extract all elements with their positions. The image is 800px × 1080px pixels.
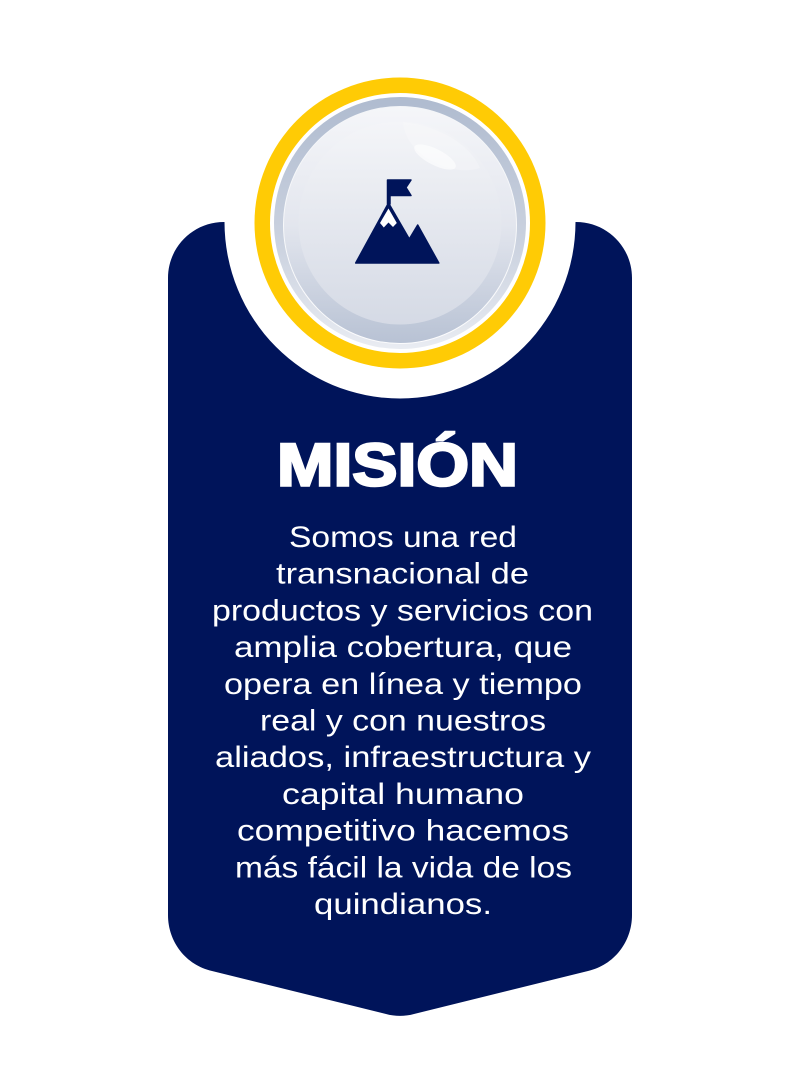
text block: mission statement: productos y servicios con (212, 594, 593, 627)
heading: MISIÓN: MISIÓN (277, 432, 518, 498)
text block: mission statement: amplia cobertura, que (234, 631, 572, 664)
text block: mission statement: Somos una red (289, 521, 517, 554)
icon badge: gold ring and glossy button (254, 78, 546, 368)
text block: mission statement: transnacional de (276, 558, 529, 591)
text block: mission statement: quindianos. (314, 888, 492, 921)
icon: mountain with flag (356, 180, 439, 263)
text block: mission statement: real y con nuestros (260, 704, 546, 738)
text block: mission statement: más fácil la vida de los (235, 851, 572, 884)
text block: mission statement: aliados, infraestructura y (215, 741, 591, 774)
text block: mission statement: competitivo hacemos (237, 815, 569, 848)
text block: mission statement: opera en línea y tiempo (224, 668, 582, 701)
panel: navy shield (168, 222, 632, 1016)
text block: mission statement (212, 521, 593, 921)
text block: mission statement: capital humano (282, 778, 524, 811)
